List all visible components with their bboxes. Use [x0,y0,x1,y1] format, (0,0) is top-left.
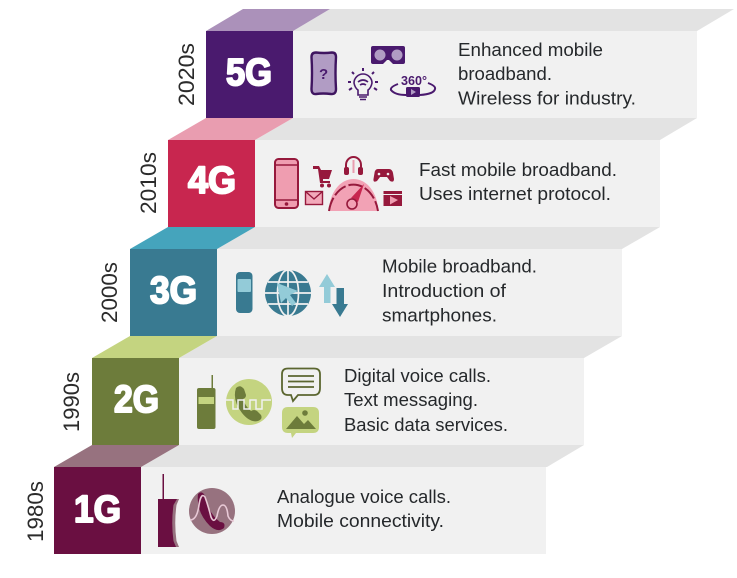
icon: smartphone with question mark: ? [319,66,328,83]
icon: digital voice call [226,379,272,425]
icon: upload arrow [319,274,335,303]
icon: film clapper [384,191,402,206]
1G label: 1G [74,489,121,531]
description: 5G: broadband. [458,64,552,84]
panel: 1G step [23,445,584,554]
icon: download arrow [332,288,348,317]
icon: globe with cursor [265,270,311,316]
icon: VR headset [371,46,405,64]
description: 1G: Analogue voice calls. [277,487,451,507]
description: 5G [458,40,636,108]
icon: 360 degree video [391,74,435,97]
icon: speedometer gauge [329,179,378,211]
description: 3G: smartphones. [382,306,497,326]
description: 4G [419,160,617,204]
icon: game controller [373,169,394,182]
icon: smartphone with question mark [312,52,336,94]
icon: 360 degree video: 360° [401,74,427,88]
4G label: 4G [188,160,236,202]
decade 2000s: 2000s [97,262,122,323]
decade 1980s: 1980s [23,481,48,542]
panel: 5G step [174,9,734,118]
description: 4G: Fast mobile broadband. [419,160,617,180]
description: 2G: Digital voice calls. [344,366,491,386]
icon: shopping cart [313,166,332,188]
description: 5G: Enhanced mobile [458,40,603,60]
icon: text message bubble [282,368,320,401]
panel: 2G step [59,336,622,445]
2G label: 2G [114,379,159,421]
decade 2010s: 2010s [136,152,161,214]
panel: 4G step [136,118,697,227]
icon: analogue brick phone [158,474,179,547]
3G label: 3G [150,270,197,312]
panel: 3G step [97,227,660,336]
description: 3G: Mobile broadband. [382,256,537,276]
description: 3G [382,256,537,326]
description: 2G: Basic data services. [344,415,508,435]
description: 2G [344,366,508,435]
icon: analogue voice call [189,488,235,534]
description: 2G: Text messaging. [344,390,478,410]
description: 1G: Mobile connectivity. [277,511,444,531]
icon: mobile phone [236,272,252,313]
decade 2020s: 2020s [174,43,199,106]
icon: smart light bulb [348,68,378,100]
description: 1G [277,487,451,531]
decade 1990s: 1990s [59,372,84,432]
description: 3G: Introduction of [382,281,507,301]
icon: brick phone [197,375,216,429]
icon: headphones [344,157,363,175]
description: 4G: Uses internet protocol. [419,184,611,204]
5G label: 5G [226,52,272,94]
icon: smartphone [275,159,298,208]
icon: image message bubble [282,407,319,438]
description: 5G: Wireless for industry. [458,88,636,108]
icon: envelope [306,192,322,204]
